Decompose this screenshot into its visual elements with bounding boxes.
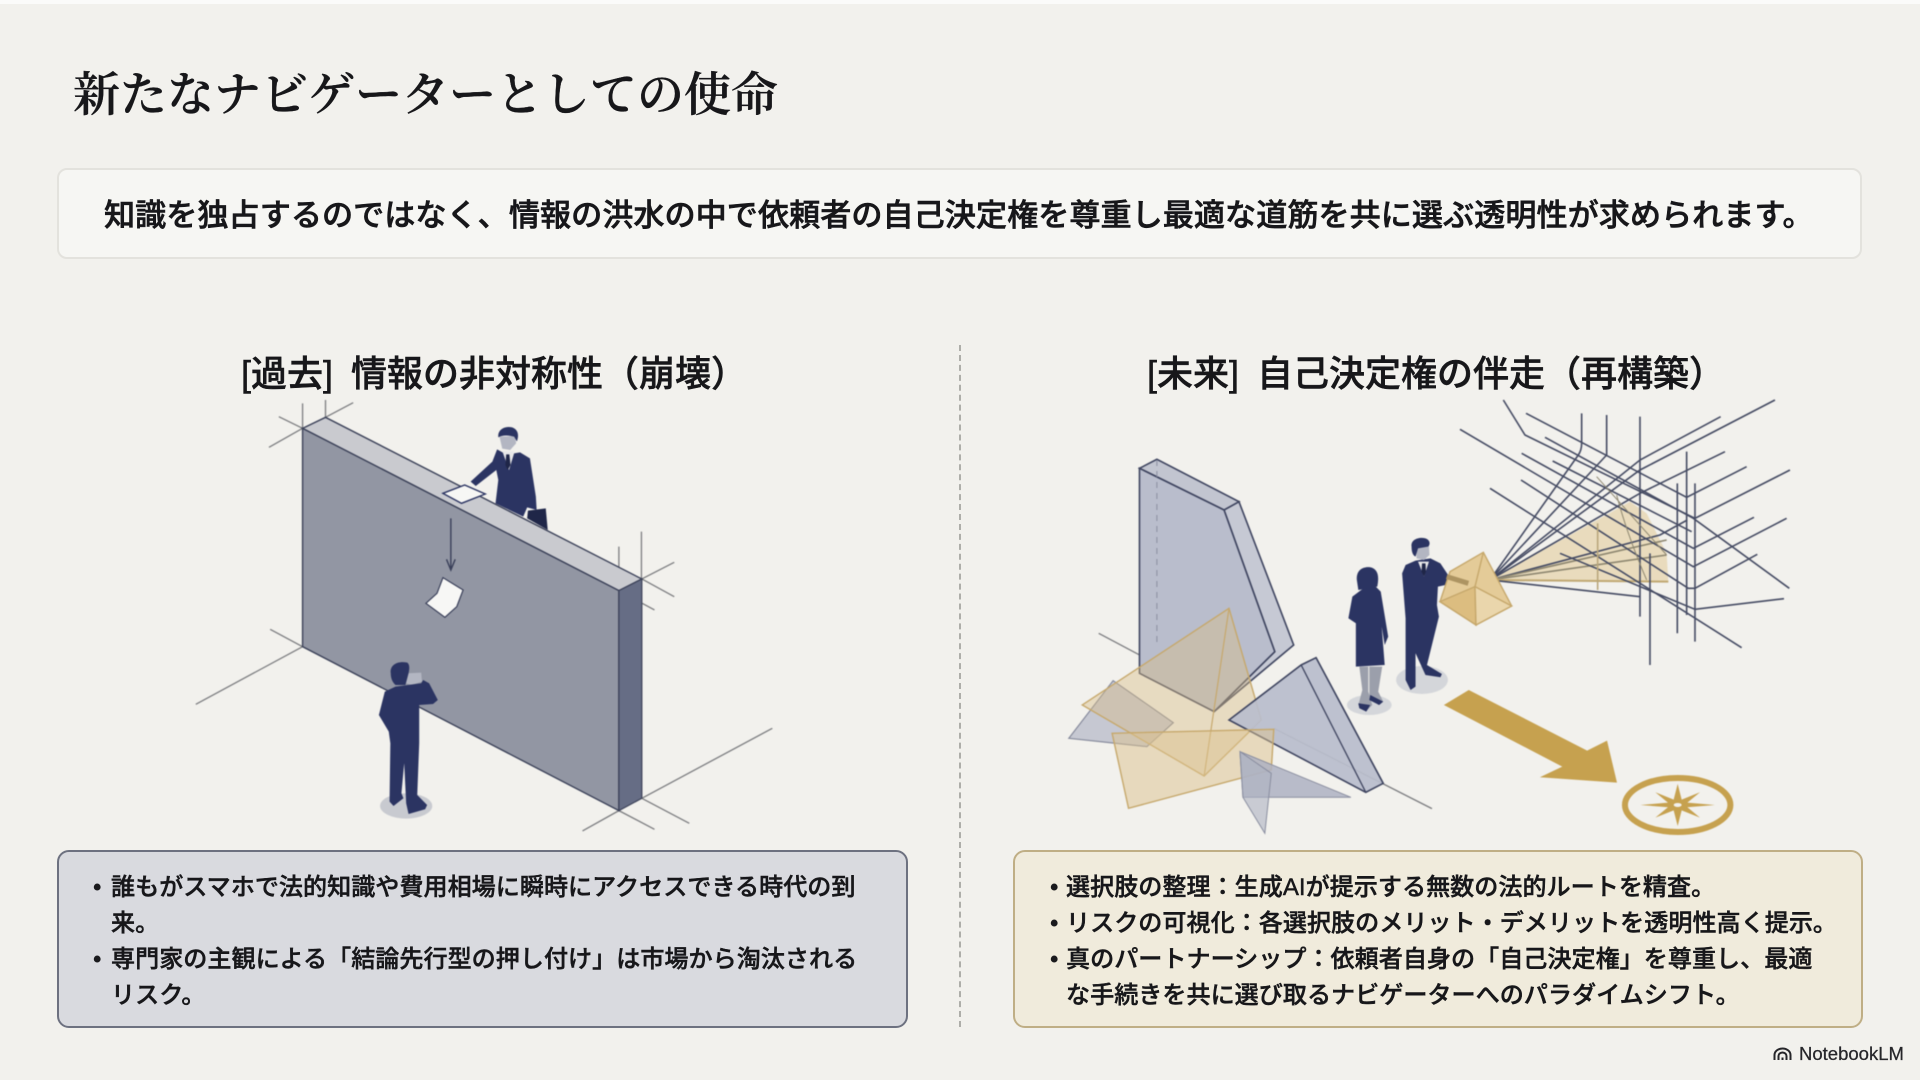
construction guide lines — [196, 400, 772, 831]
panel: future bullets — [1013, 850, 1863, 1028]
shards: gold and gray fragments — [1069, 608, 1383, 833]
arrow: falling document — [446, 518, 455, 570]
person: expert on top of wall — [443, 427, 548, 530]
bullet: organizing options: 選択肢の整理：生成AIが提示する無数の法的ルートを精査。 — [1066, 874, 1715, 901]
arrow: gold direction arrow — [1444, 690, 1617, 783]
bullet: true partnership — [1050, 946, 1812, 1009]
bullet: conclusion-first risk — [93, 946, 857, 1009]
logo: NotebookLM: NotebookLM — [1799, 1043, 1904, 1064]
bullet: true partnership: な手続きを共に選び取るナビゲーターへのパラダイムシフト。 — [1066, 982, 1740, 1009]
person: woman client — [1347, 567, 1392, 715]
heading: past: [過去] 情報の非対称性（崩壊） — [241, 353, 747, 394]
bullet: visualizing risk: リスクの可視化：各選択肢のメリット・デメリットを透明性高く提示。 — [1066, 910, 1837, 937]
bullet: true partnership: 真のパートナーシップ：依頼者自身の「自己決定権」を尊重し、最適 — [1066, 946, 1812, 973]
title: 新たなナビゲーターとしての使命 — [73, 70, 778, 122]
person: navigator man — [1396, 538, 1468, 694]
person: client looking up — [379, 662, 438, 819]
icon: gold gem held by man — [1440, 552, 1512, 625]
icon: falling paper — [426, 578, 463, 617]
wall side face — [619, 579, 642, 811]
bullet: smartphone access — [93, 874, 856, 937]
bullet: true partnership: • — [1050, 946, 1058, 973]
bullet: organizing options: • — [1050, 874, 1058, 901]
bullet: smartphone access: • — [93, 874, 101, 901]
wall top face — [303, 417, 642, 591]
bullet: conclusion-first risk: • — [93, 946, 101, 973]
bullet: conclusion-first risk: 専門家の主観による「結論先行型の押し付け」は市場から淘汰される — [111, 946, 857, 973]
bullet: conclusion-first risk: リスク。 — [111, 982, 205, 1009]
bullet: smartphone access: 誰もがスマホで法的知識や費用相場に瞬時にアクセスできる時代の到 — [111, 874, 856, 901]
bullet: visualizing risk: • — [1050, 910, 1058, 937]
callout: mission statement — [57, 168, 1862, 259]
wall front face — [303, 428, 619, 811]
callout: mission statement: 知識を独占するのではなく、情報の洪水の中で依頼者の自己決定権を尊重し最適な道筋を共に選ぶ透明性が求められます。 — [104, 198, 1814, 233]
panel: past bullets — [57, 850, 908, 1028]
heading: future: [未来] 自己決定権の伴走（再構築） — [1147, 353, 1725, 394]
network of legal routes — [1460, 400, 1790, 665]
light beam fan — [1490, 502, 1668, 582]
shard: large broken wall — [1139, 459, 1294, 712]
bullet: smartphone access: 来。 — [111, 910, 159, 937]
icon: compass — [1625, 778, 1730, 832]
